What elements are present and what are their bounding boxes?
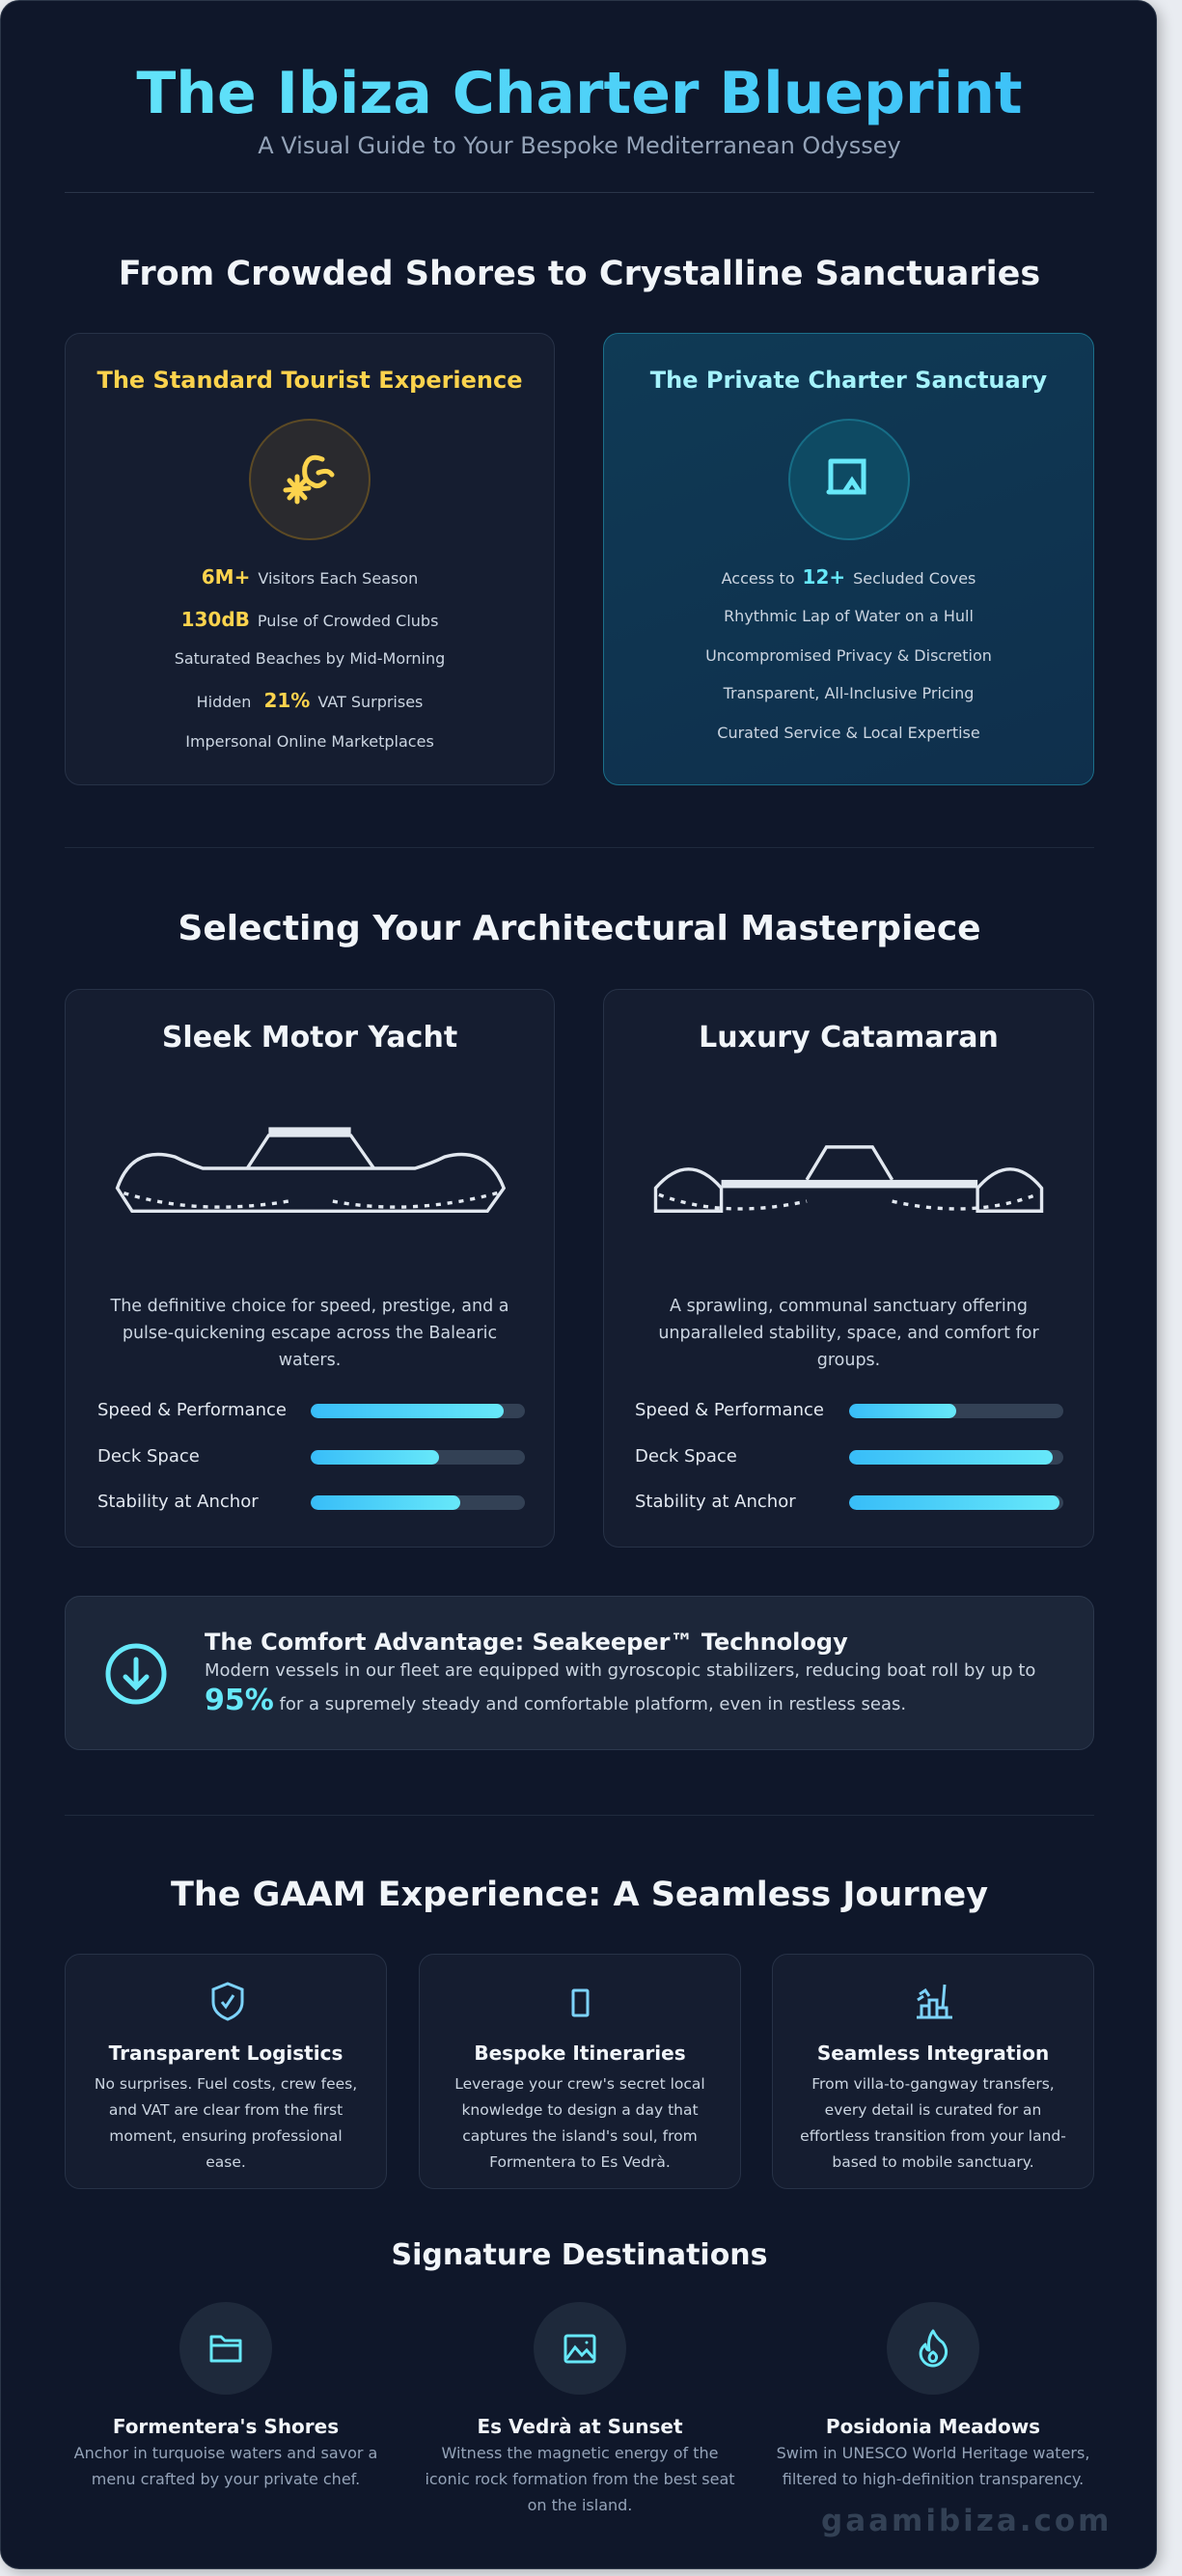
watermark: gaamibiza.com	[821, 2504, 1112, 2538]
card title: Luxury Catamaran	[699, 1021, 999, 1055]
card title: Sleek Motor Yacht	[162, 1021, 457, 1055]
stat list: Hidden 21% VAT Surprises	[197, 689, 423, 712]
bar chart: catamaran ratings: Stability at Anchor	[635, 1492, 796, 1512]
card title: The Standard Tourist Experience	[96, 367, 523, 394]
destination: formentera: Anchor in turquoise waters and savor a menu crafted by your private chef.	[74, 2444, 377, 2488]
benefits list: Transparent, All-Inclusive Pricing	[724, 684, 974, 702]
bar chart: catamaran ratings	[635, 1400, 1063, 1512]
callout text: Modern vessels in our fleet are equipped with gyroscopic stabilizers, reducing boat roll by up to	[205, 1660, 1035, 1681]
icon: image	[534, 2302, 626, 2395]
destination: posidonia: Posidonia Meadows	[826, 2415, 1040, 2438]
subtitle: A Visual Guide to Your Bespoke Mediterranean Odyssey	[258, 132, 901, 159]
destination: posidonia	[777, 2302, 1089, 2488]
panel: private charter sanctuary	[603, 333, 1094, 785]
panel: bespoke itineraries	[419, 1954, 741, 2189]
panel: seamless integration	[772, 1954, 1094, 2189]
icon: phone	[571, 1989, 589, 2016]
stat list: Impersonal Online Marketplaces	[185, 732, 434, 751]
icon: yacht illustration	[116, 1127, 506, 1213]
benefits list: Access to 12+ Secluded Coves	[722, 565, 976, 589]
callout text: The Comfort Advantage: Seakeeper™ Technology	[205, 1629, 848, 1656]
panel: bespoke itineraries: Bespoke Itineraries	[474, 2042, 686, 2065]
heading: GAAM experience: The GAAM Experience: A Seamless Journey	[171, 1876, 988, 1914]
panel: motor yacht	[65, 989, 555, 1548]
bar chart: yacht ratings: Speed & Performance	[97, 1400, 287, 1420]
panel: transparent logistics: Transparent Logistics	[109, 2042, 343, 2065]
benefits list	[705, 565, 992, 742]
panel: catamaran	[603, 989, 1094, 1548]
stat list: 6M+ Visitors Each Season	[202, 565, 418, 589]
icon: folder	[179, 2302, 272, 2395]
destination: es vedra: Witness the magnetic energy of the iconic rock formation from the best seat on the island.	[425, 2444, 735, 2514]
card title: The Private Charter Sanctuary	[650, 367, 1047, 394]
benefits list: Rhythmic Lap of Water on a Hull	[724, 607, 974, 625]
heading: from crowded shores: From Crowded Shores to Crystalline Sanctuaries	[119, 255, 1040, 293]
panel: transparent logistics: No surprises. Fuel costs, crew fees, and VAT are clear from the first moment, ensuring professional ease.	[95, 2075, 357, 2171]
panel: seamless integration: Seamless Integration	[817, 2042, 1049, 2065]
title: The Ibiza Charter Blueprint	[136, 60, 1023, 127]
destination: formentera	[73, 2302, 377, 2488]
bar chart: yacht ratings: Stability at Anchor	[97, 1492, 259, 1512]
bar chart: catamaran ratings: Speed & Performance	[635, 1400, 824, 1420]
icon: down arrow circle	[106, 1644, 166, 1704]
description: A sprawling, communal sanctuary offering unparalleled stability, space, and comfort for groups.	[658, 1297, 1039, 1370]
destination: es vedra	[425, 2302, 735, 2514]
icon: city	[917, 1984, 952, 2018]
stat list	[175, 565, 445, 751]
bar chart: yacht ratings	[97, 1400, 525, 1512]
panel: bespoke itineraries: Leverage your crew's secret local knowledge to design a day that captures the island's soul, from Formentera to Es Vedrà.	[454, 2075, 705, 2171]
callout text	[205, 1629, 1035, 1717]
panel: standard tourist experience	[65, 333, 555, 785]
icon: crowd	[249, 419, 371, 540]
callout: seakeeper	[65, 1596, 1094, 1750]
benefits list: Curated Service & Local Expertise	[717, 724, 980, 742]
bar chart: yacht ratings: Deck Space	[97, 1446, 200, 1466]
destination: posidonia: Swim in UNESCO World Heritage waters, filtered to high-definition transparency.	[777, 2444, 1089, 2488]
description: The definitive choice for speed, prestige, and a pulse-quickening escape across the Balearic waters.	[111, 1297, 509, 1370]
benefits list: Uncompromised Privacy & Discretion	[705, 646, 992, 665]
bar chart: catamaran ratings: Deck Space	[635, 1446, 737, 1466]
heading: signature destinations: Signature Destinations	[391, 2238, 768, 2272]
panel: transparent logistics	[65, 1954, 387, 2189]
callout text: 95% for a supremely steady and comfortable platform, even in restless seas.	[205, 1684, 906, 1717]
heading: selecting: Selecting Your Architectural Masterpiece	[178, 909, 981, 948]
stat list: 130dB Pulse of Crowded Clubs	[181, 608, 438, 631]
destination: es vedra: Es Vedrà at Sunset	[477, 2415, 683, 2438]
destination: formentera: Formentera's Shores	[113, 2415, 339, 2438]
panel: seamless integration: From villa-to-gangway transfers, every detail is curated for an effortless transition from your land-based to mobile sanctuary.	[800, 2075, 1066, 2171]
icon: catamaran illustration	[654, 1145, 1044, 1213]
stat list: Saturated Beaches by Mid-Morning	[175, 649, 445, 668]
icon: flame	[887, 2302, 979, 2395]
icon: shield	[212, 1982, 243, 2021]
icon: frame	[788, 419, 910, 540]
